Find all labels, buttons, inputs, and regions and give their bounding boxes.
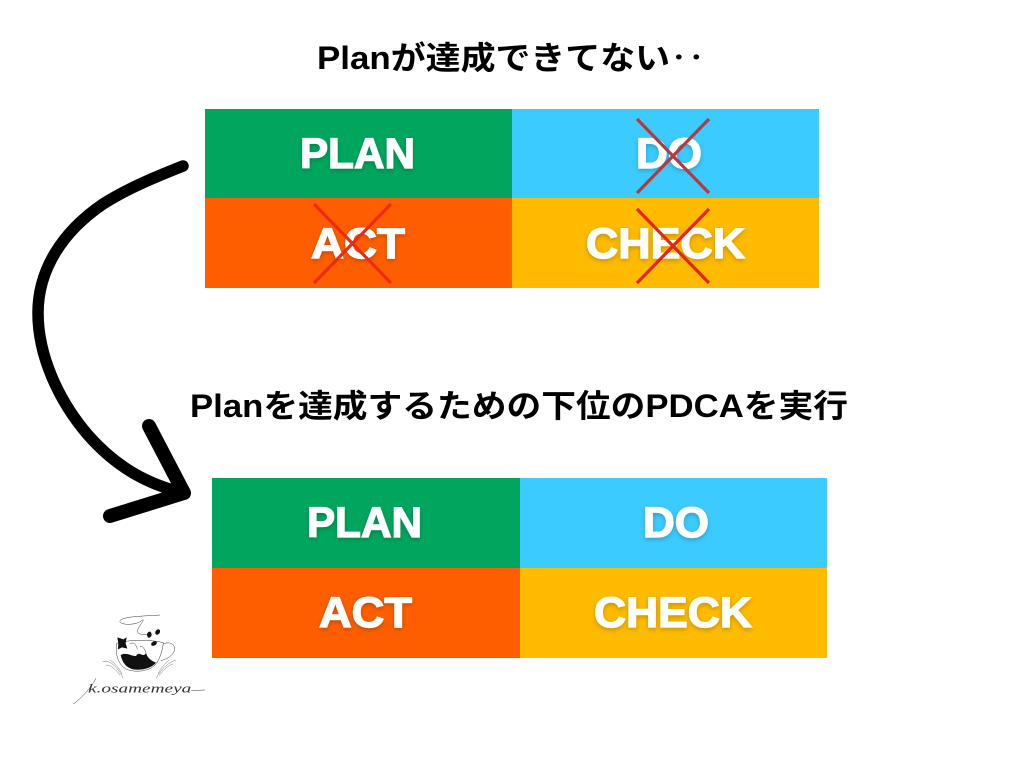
top cell: plan	[205, 109, 512, 198]
top cell: plan: PLAN	[300, 130, 415, 178]
bottom cell: check: CHECK	[594, 589, 752, 637]
subheading: Planを達成するための下位のPDCAを実行	[190, 388, 848, 424]
panel: bottom PDCA grid	[212, 478, 827, 658]
bottom cell: act: ACT	[319, 589, 412, 637]
red cross over act	[314, 204, 391, 283]
top cell: check	[512, 198, 819, 288]
logo: coffee cup with hands and signature	[73, 615, 205, 704]
bottom cell: plan	[212, 478, 520, 568]
top cell: act	[205, 198, 512, 288]
top cell: do	[512, 109, 819, 198]
red cross over check	[637, 209, 709, 283]
title: top heading: Planが達成できてない‥	[317, 40, 705, 76]
panel: top PDCA grid	[205, 109, 819, 288]
bottom cell: do: DO	[643, 499, 709, 547]
bottom cell: plan: PLAN	[307, 499, 422, 547]
top cell: do: DO	[636, 130, 702, 178]
bottom cell: act	[212, 568, 520, 658]
bottom cell: check	[520, 568, 827, 658]
bottom cell: do	[520, 478, 827, 568]
top cell: check: CHECK	[586, 220, 745, 268]
signature: k.osamemeya	[88, 681, 191, 695]
red cross over do	[637, 119, 709, 193]
top cell: act: ACT	[311, 220, 405, 268]
arrow: from top grid to bottom grid	[38, 166, 184, 516]
